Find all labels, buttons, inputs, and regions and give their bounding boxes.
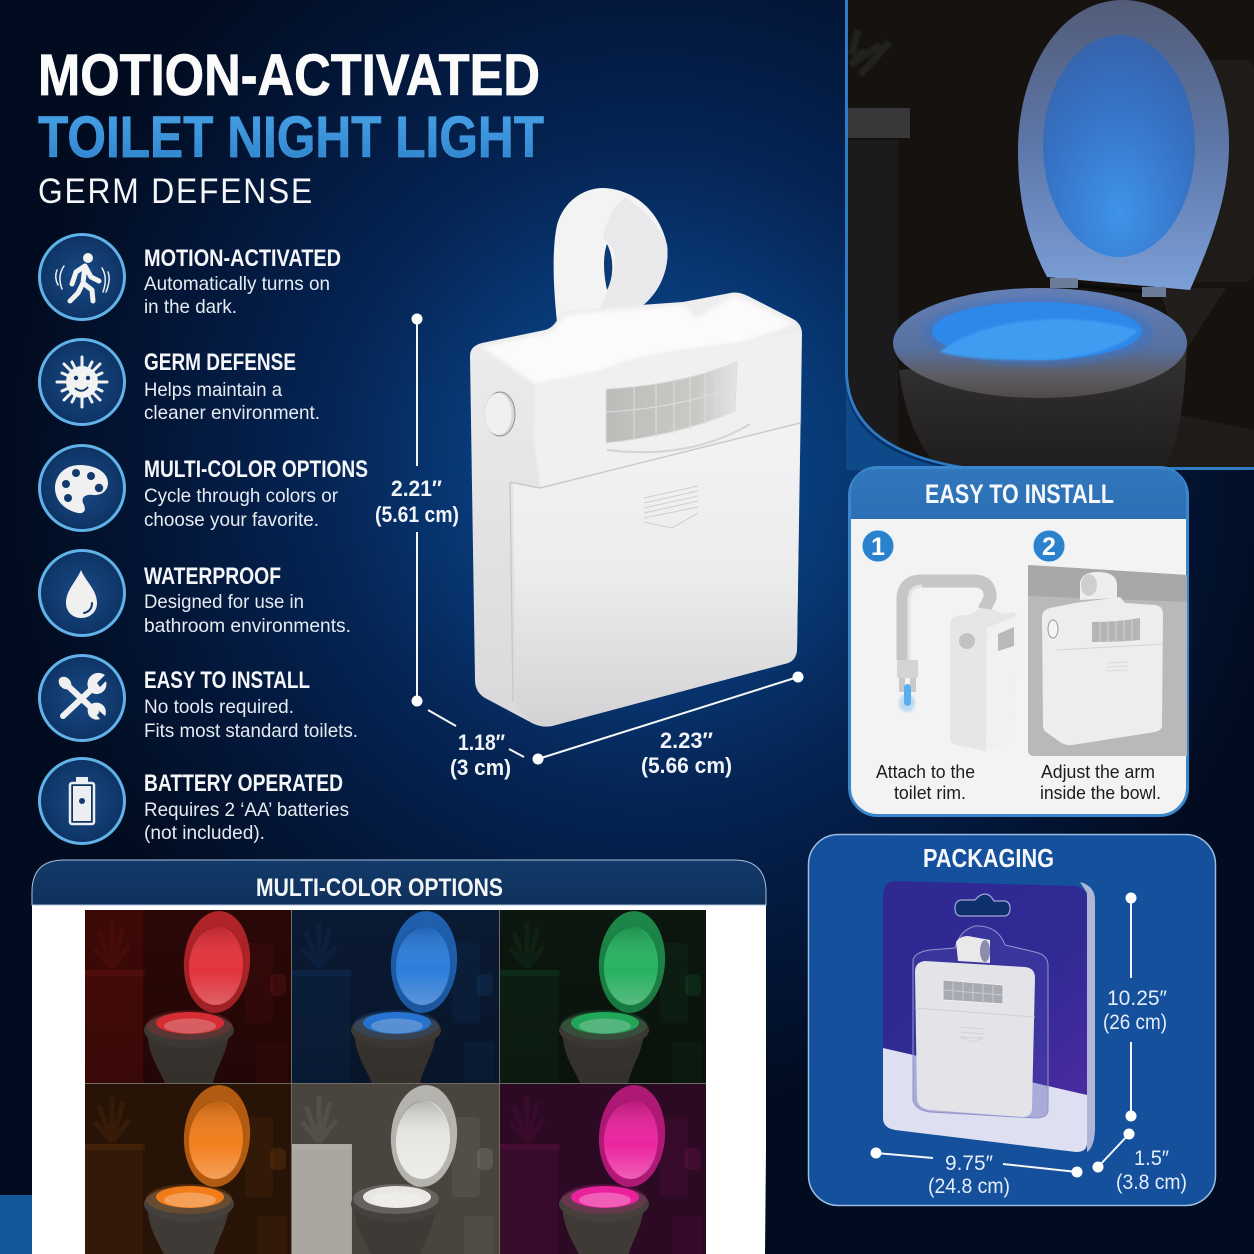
top surface highlight [482, 296, 795, 384]
icon: water drop [40, 550, 124, 636]
dimension: depth 1.18: 1.18″ [458, 730, 505, 755]
main product: white motion sensor unit [470, 188, 802, 727]
dimension: package height: (26 cm) [1103, 1011, 1167, 1034]
install heading: EASY TO INSTALL [925, 479, 1114, 509]
step 1 badge: 1 [871, 533, 885, 561]
title: TOILET NIGHT LIGHT [38, 105, 544, 170]
dimension: height 2.21: 2.21″ [391, 476, 442, 501]
dimension: package depth: (3.8 cm) [1116, 1171, 1187, 1194]
panel: easy to install [850, 468, 1188, 816]
cell: orange [85, 1083, 291, 1254]
dimension: height 2.21: (5.61 cm) [375, 502, 459, 527]
title: MOTION-ACTIVATED [38, 43, 540, 108]
step 1 illustration [897, 581, 1017, 751]
feature: motion-activated [40, 234, 341, 320]
panel: packaging [808, 834, 1216, 1206]
text: easy to install: No tools required. [144, 696, 294, 718]
panel: multi-color options [32, 860, 766, 1254]
feature: multi-color options [40, 446, 368, 531]
text: motion-activated: in the dark. [144, 296, 237, 318]
icon: walking person with motion waves [40, 234, 124, 320]
battery cover vent [644, 486, 698, 528]
bowl glow [932, 302, 1142, 360]
text: germ defense: Helps maintain a [144, 379, 282, 401]
title: GERM DEFENSE [38, 172, 314, 211]
cell: blue [292, 909, 499, 1083]
side button [484, 392, 515, 436]
icon: germ [40, 340, 124, 424]
seat [893, 288, 1187, 398]
text: battery operated: BATTERY OPERATED [144, 770, 343, 797]
bowl [899, 345, 1187, 470]
cell: green [500, 909, 706, 1083]
multi-color header [32, 860, 766, 905]
text: multi-color options: Cycle through colors or [144, 485, 338, 507]
feature: easy to install [40, 656, 358, 742]
panel: lit toilet photo [845, 0, 1254, 470]
motion sensor window [606, 362, 750, 452]
icon: battery [40, 758, 124, 844]
dimension: width 2.23: (5.66 cm) [641, 753, 732, 778]
step 1 badge [862, 530, 894, 562]
hinges [1050, 278, 1078, 288]
feature: germ defense [40, 340, 320, 424]
step 1 caption: Attach to the [876, 761, 975, 782]
text: easy to install: Fits most standard toilets. [144, 720, 358, 742]
step 2 badge [1033, 530, 1065, 562]
dimension: width 2.23 [532, 672, 804, 778]
plant [850, 30, 890, 75]
text: battery operated: Requires 2 ‘AA’ batteries [144, 799, 349, 821]
baseboard [1165, 412, 1254, 467]
dimension: height 2.21 [375, 314, 459, 706]
step 2 caption: Adjust the arm [1041, 761, 1155, 782]
text: waterproof [144, 563, 351, 637]
cell: red [85, 909, 291, 1083]
text: easy to install [144, 667, 358, 742]
feature: waterproof [40, 550, 351, 637]
left edge accent block [0, 1195, 32, 1254]
dimension: package width: 9.75″ [945, 1152, 994, 1175]
step 1 caption: toilet rim. [894, 782, 966, 803]
photo grid [85, 909, 706, 1254]
blister shell [913, 926, 1048, 1118]
dimension: width 2.23: 2.23″ [660, 728, 713, 753]
cell: magenta [500, 1083, 706, 1254]
text: easy to install: EASY TO INSTALL [144, 667, 310, 694]
text: multi-color options [144, 456, 368, 531]
text: motion-activated [144, 245, 341, 318]
multi-color heading: MULTI-COLOR OPTIONS [256, 874, 503, 902]
packaging heading: PACKAGING [923, 843, 1054, 873]
hanging clip loop [554, 188, 668, 322]
dimension: depth 1.18 [428, 710, 524, 780]
install header [851, 469, 1186, 519]
tank deck [1162, 288, 1226, 348]
dimension: package height [1103, 892, 1168, 1122]
feature list [40, 234, 368, 844]
text: battery operated: (not included). [144, 822, 265, 844]
cover seam [510, 423, 800, 702]
dimension: package height: 10.25″ [1107, 987, 1168, 1010]
step 2 caption [1040, 761, 1161, 803]
text: germ defense: GERM DEFENSE [144, 349, 296, 376]
text: multi-color options: MULTI-COLOR OPTIONS [144, 456, 368, 483]
upper front shading [534, 332, 800, 488]
dimension: package width [870, 1148, 1082, 1198]
feature: battery operated [40, 758, 349, 844]
icon: palette [40, 446, 124, 530]
step 2 caption: inside the bowl. [1040, 782, 1161, 803]
text: waterproof: Designed for use in [144, 591, 304, 613]
text: motion-activated: MOTION-ACTIVATED [144, 245, 341, 272]
lower cover front [513, 424, 800, 727]
cell: white [292, 1083, 499, 1254]
dimension: depth 1.18: (3 cm) [450, 755, 511, 780]
tank [1190, 60, 1254, 282]
step 1 caption [876, 761, 975, 803]
dimension: package depth [1092, 1128, 1187, 1194]
packaged unit [915, 961, 1035, 1117]
text: waterproof: WATERPROOF [144, 563, 281, 590]
title [38, 43, 544, 211]
dimension: package depth: 1.5″ [1134, 1147, 1170, 1170]
text: multi-color options: choose your favorite. [144, 509, 319, 531]
text: germ defense [144, 349, 320, 424]
unit body silhouette [470, 292, 802, 727]
text: battery operated [144, 770, 349, 844]
icon: crossed tools [40, 656, 124, 740]
dimension: package width: (24.8 cm) [928, 1175, 1010, 1198]
text: waterproof: bathroom environments. [144, 615, 351, 637]
text: motion-activated: Automatically turns on [144, 273, 330, 295]
hang hole [955, 894, 1010, 916]
lid [1018, 0, 1229, 290]
text: germ defense: cleaner environment. [144, 402, 320, 424]
step 2 badge: 2 [1042, 533, 1056, 561]
vanity cabinet [848, 140, 898, 470]
blister card [883, 881, 1095, 1152]
step 2 illustration [1028, 565, 1187, 756]
